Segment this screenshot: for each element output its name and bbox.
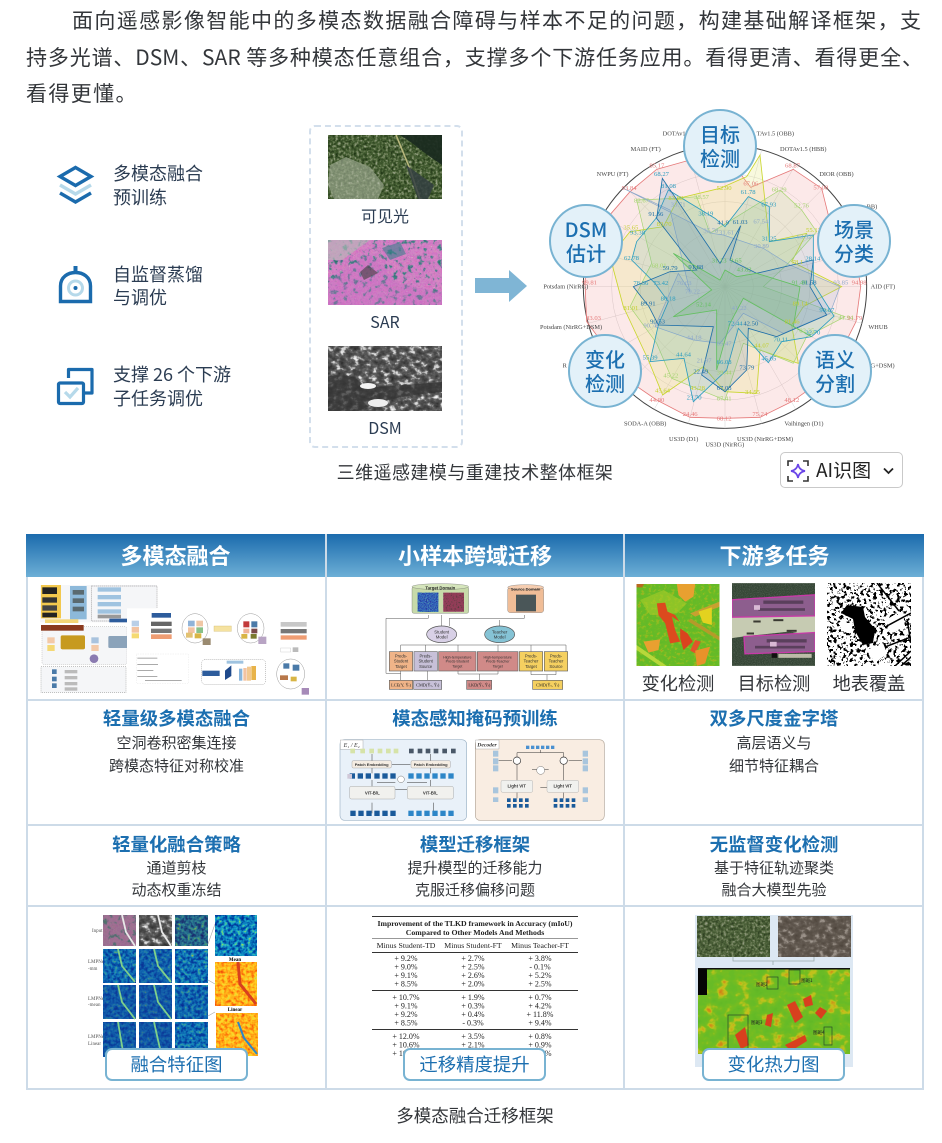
radar chart: 59.79 <box>663 265 678 272</box>
table: accuracy improvement: + 9.2% <box>394 1010 418 1019</box>
feature: 26 downstream tasks <box>113 361 231 410</box>
figure: change heatmap: 图斑1 <box>801 977 813 984</box>
radar chart: 67.41 <box>717 396 732 403</box>
radar chart: 91.79 <box>847 315 863 322</box>
header: few-sample cross-domain transfer: 小样本跨域迁移 <box>398 539 552 571</box>
diagram: student-teacher transfer: Source Domain <box>511 586 541 591</box>
radar chart: 41.22 <box>732 305 747 312</box>
table: accuracy improvement: + 10.6% <box>392 1040 420 1050</box>
radar chart: 21.97 <box>697 358 712 365</box>
feature: multimodal pretraining: 多模态融合 <box>113 160 203 186</box>
intro paragraph: 看得更懂。 <box>26 78 138 108</box>
radar chart: 44.90 <box>649 397 665 404</box>
label: land cover: 地表覆盖 <box>833 670 905 696</box>
heading: 轻量级多模态融合 <box>103 705 250 731</box>
radar chart: 78.36 <box>633 280 649 287</box>
radar chart: Vaihingen (D1) <box>784 420 824 427</box>
table: accuracy improvement: + 10.7% <box>392 993 420 1002</box>
radar chart: 73.42 <box>653 280 668 287</box>
radar chart: G+DSM) <box>871 362 895 369</box>
figure: fused feature maps: LMPNet <box>88 960 106 965</box>
bubble: scene classification: 分类 <box>834 238 874 267</box>
label: SAR: SAR <box>370 309 400 333</box>
text: 融合大模型先验 <box>721 879 826 900</box>
radar chart: 80.18 <box>661 296 676 303</box>
table: accuracy improvement: + 0.7% <box>528 993 552 1002</box>
radar chart: 61.78 <box>741 189 756 196</box>
radar chart: 67.03 <box>717 385 732 392</box>
image: object detection sample <box>732 583 815 666</box>
radar chart: 22.49 <box>693 368 709 375</box>
diagram: student-teacher transfer: High-temperature <box>483 656 512 660</box>
figure: fused feature maps: LMPNet <box>88 997 106 1002</box>
radar chart: 83.88 <box>668 195 684 202</box>
radar chart: 32.70 <box>805 330 821 337</box>
radar chart: 81.01 <box>623 305 638 312</box>
table: accuracy improvement: + 4.2% <box>528 1002 552 1010</box>
header: few-sample cross-domain transfer <box>327 534 623 577</box>
image: land cover sample <box>827 583 911 666</box>
radar chart: 35.78 <box>703 228 719 235</box>
radar chart: 94.98 <box>852 280 867 287</box>
figure: fused feature maps: LMPNet <box>88 1035 106 1040</box>
header: downstream multitask: 下游多任务 <box>719 539 830 571</box>
radar chart: 44.18 <box>687 334 702 341</box>
figure: fused feature maps: Mean <box>229 958 241 963</box>
figure: change heatmap: 图斑3 <box>751 1019 763 1026</box>
radar chart: 89.91 <box>641 300 656 307</box>
radar chart: 52.76 <box>794 202 810 209</box>
radar chart: 41.94 <box>838 314 854 321</box>
radar chart: BB) <box>867 204 877 211</box>
table: accuracy improvement: + 3.5% <box>461 1032 485 1041</box>
diagram: encoder and decoder: Patch Embedding <box>355 762 389 767</box>
diagram: encoder and decoder: Patch Embedding <box>414 762 448 767</box>
diagram: encoder and decoder: Light ViT <box>553 784 572 789</box>
figure: fused feature maps: -mm <box>88 967 98 972</box>
tag: change heatmap <box>702 1048 845 1081</box>
diagram: student-teacher transfer: Model <box>436 635 448 640</box>
radar chart: 45.64 <box>655 387 671 394</box>
caption: overall framework: 三维遥感建模与重建技术整体框架 <box>337 459 613 485</box>
table: accuracy improvement: + 2.0% <box>461 980 485 988</box>
diagram: student-teacher transfer: Target <box>493 664 503 668</box>
radar chart: 63.52 <box>797 234 812 241</box>
text: 动态权重冻结 <box>131 879 222 900</box>
text <box>109 732 244 776</box>
table: accuracy improvement: + 11.8% <box>527 1010 554 1019</box>
image: change detection sample <box>636 584 720 666</box>
table: accuracy improvement: + 10.4% <box>392 1049 420 1058</box>
icon: AI scan <box>787 460 809 482</box>
figure: change heatmap <box>695 915 853 1067</box>
radar chart: 66.08 <box>717 359 732 366</box>
cell: dual multiscale pyramid <box>710 705 838 776</box>
table: accuracy improvement: + 2.6% <box>461 971 485 980</box>
bubble: change detection: 检测 <box>585 368 625 397</box>
image: SAR <box>328 240 442 305</box>
table: accuracy improvement: + 9.1% <box>394 971 418 980</box>
radar chart: 70.22 <box>685 288 700 295</box>
radar chart: 31.13 <box>712 258 727 265</box>
table: accuracy improvement: - 0.3% <box>462 1018 484 1028</box>
radar chart: 42.50 <box>743 321 759 328</box>
bubble: DSM estimation <box>549 204 623 278</box>
table: accuracy improvement: + 8.5% <box>394 980 418 988</box>
tag: transfer accuracy improvement: 迁移精度提升 <box>419 1051 530 1077</box>
icon: self-supervised target <box>58 266 92 304</box>
figure: fused feature maps <box>88 915 258 1057</box>
cell: lightweight fusion strategy <box>112 831 241 900</box>
text: 提升模型的迁移能力 <box>407 857 542 878</box>
table: accuracy improvement: + 8.5% <box>394 1018 418 1028</box>
feature: multimodal pretraining <box>113 160 203 210</box>
radar chart: MAID (FT) <box>631 146 661 153</box>
radar chart: 68.29 <box>772 186 787 193</box>
radar chart: 90.53 <box>650 318 666 325</box>
radar chart: 31.61 <box>719 230 734 237</box>
table: accuracy improvement: + 3.8% <box>528 954 552 963</box>
tag: transfer accuracy improvement <box>403 1048 546 1081</box>
diagram: student-teacher transfer: Student <box>419 659 434 664</box>
radar chart: 91.58 <box>802 280 817 287</box>
bubble: semantic segmentation: 分割 <box>815 368 855 397</box>
radar chart: Potsdam (NirRG) <box>543 283 588 290</box>
cell: modality-aware mask pretraining <box>340 705 605 821</box>
text: 细节特征耦合 <box>729 754 819 776</box>
table: accuracy improvement: Compared to Other Models And Methods <box>406 928 544 937</box>
radar chart: 62.78 <box>624 255 640 262</box>
text: 高层语义与 <box>736 732 812 753</box>
diagram: student-teacher transfer: Student <box>394 659 409 664</box>
heading: 双多尺度金字塔 <box>710 705 838 731</box>
radar chart: 82.67 <box>634 197 650 204</box>
radar chart: 99.81 <box>582 279 597 286</box>
text: 空洞卷积密集连接 <box>116 732 236 753</box>
bubble: semantic segmentation <box>798 334 872 408</box>
diagram: student-teacher transfer: Preds- <box>525 654 538 659</box>
diagram: multimodal fusion network <box>40 585 309 695</box>
table: accuracy improvement: + 5.2% <box>528 971 552 980</box>
intro paragraph: 面向遥感影像智能中的多模态数据融合障碍与样本不足的问题，构建基础解译框架，支 <box>72 5 922 35</box>
radar chart: 28.14 <box>805 256 821 263</box>
radar chart: 44.64 <box>676 352 692 359</box>
radar chart: 72.44 <box>728 321 743 328</box>
radar chart: 33.71 <box>671 202 686 209</box>
arrow <box>475 270 527 302</box>
diagram: student-teacher transfer: Source <box>549 664 563 669</box>
radar chart: 38.57 <box>694 194 710 201</box>
bubble: change detection <box>568 334 642 408</box>
diagram: encoder and decoder: Light ViT <box>507 784 526 789</box>
radar chart: 65.47 <box>717 340 732 347</box>
heading: 模型迁移框架 <box>420 831 530 857</box>
heading: 无监督变化检测 <box>710 831 838 857</box>
radar chart: 85.17 <box>649 162 665 169</box>
diagram: student-teacher transfer: Model <box>494 635 506 640</box>
table: accuracy improvement: + 2.5% <box>461 962 485 972</box>
text <box>407 857 542 900</box>
radar chart: 43.82 <box>737 267 752 274</box>
radar chart: 68.27 <box>654 171 670 178</box>
radar chart: 24.46 <box>683 411 698 418</box>
diagram: student-teacher transfer: Teacher <box>524 659 539 664</box>
bubble: object detection <box>683 109 757 183</box>
button: AI image recognition <box>780 452 903 488</box>
text: 跨模态特征对称校准 <box>109 754 244 776</box>
radar chart: 90.78 <box>643 322 659 329</box>
radar chart: US3D (NirRG) <box>705 441 744 448</box>
label: DSM: DSM <box>368 415 402 439</box>
radar chart: Potsdam (NirRG+DSM) <box>540 324 602 331</box>
diagram: student-teacher transfer: Target <box>525 664 538 669</box>
radar chart: 81.08 <box>661 183 677 190</box>
radar chart: 39.44 <box>717 370 732 377</box>
radar chart: 41.9 <box>717 220 730 227</box>
table: accuracy improvement: + 9.0% <box>394 962 418 972</box>
radar chart: 91.49 <box>792 279 807 286</box>
tag: fusion feature map <box>105 1048 248 1081</box>
table: accuracy improvement: Improvement of the TLKD framework in Accuracy (mIoU) <box>378 919 573 928</box>
radar chart: 34.55 <box>745 389 761 396</box>
bubble: scene classification: 场景 <box>834 214 874 243</box>
radar chart: 67.06 <box>743 181 759 188</box>
diagram: student-teacher transfer: CMD(Ŷs, Ŷt) <box>536 683 560 689</box>
table: accuracy improvement: + 0.4% <box>461 1010 485 1019</box>
radar chart: 30.89 <box>754 243 770 250</box>
bubble: DSM estimation: DSM <box>565 214 607 243</box>
radar chart: 9.65 <box>730 258 742 265</box>
radar chart: 93.84 <box>622 185 637 192</box>
table: accuracy improvement: Minus Teacher-FT <box>511 941 569 950</box>
table: accuracy improvement: + 2.7% <box>461 954 485 963</box>
radar chart: 48.12 <box>784 397 799 404</box>
radar chart: 43.28 <box>690 385 706 392</box>
radar chart: 82.25 <box>799 328 815 335</box>
radar chart: 52.14 <box>696 302 712 309</box>
figure: fused feature maps: -mean <box>88 1003 101 1008</box>
label: object detection: 目标检测 <box>738 670 810 696</box>
radar chart: 68.87 <box>785 162 801 169</box>
diagram: student-teacher transfer: Source <box>419 664 433 669</box>
diagram: student-teacher transfer: CMD(Ŷs, Ŷt) <box>416 683 440 689</box>
radar chart: 67.93 <box>761 202 777 209</box>
feature: multimodal pretraining: 预训练 <box>113 184 167 210</box>
table: accuracy improvement: + 1.9% <box>461 993 485 1002</box>
radar chart: US3D (D1) <box>669 436 698 443</box>
intro paragraph: 持多光谱、DSM、SAR 等多种模态任意组合，支撑多个下游任务应用。看得更清、看得更全、 <box>26 42 923 72</box>
radar chart: 76.63 <box>677 280 692 287</box>
radar chart: 55.13 <box>806 227 822 234</box>
radar chart: 93.85 <box>833 280 849 287</box>
feature: 26 downstream tasks: 支撑 26 个下游 <box>113 361 231 387</box>
radar chart: 78.1 <box>792 259 803 266</box>
diagram: student-teacher transfer: LCE(Y, Ŷt) <box>391 683 411 689</box>
caption: multimodal fusion transfer framework: 多模态融合迁移框架 <box>396 1103 554 1128</box>
table: accuracy improvement: + 0.8% <box>528 1032 552 1041</box>
header: multimodal fusion: 多模态融合 <box>120 539 230 571</box>
radar chart: DIOR (OBB) <box>819 171 854 178</box>
radar chart: 31.25 <box>762 236 777 243</box>
figure: fused feature maps: Linear <box>228 1008 243 1013</box>
radar chart: AID (FT) <box>871 283 895 290</box>
cell: lightweight multimodal fusion <box>103 705 250 776</box>
radar chart: 89.14 <box>793 300 808 307</box>
bubble: object detection: 检测 <box>700 143 740 172</box>
text: 克服迁移偏移问题 <box>415 879 535 900</box>
cell: unsupervised change detection <box>710 831 838 900</box>
text <box>131 857 222 900</box>
figure: fused feature maps: Linear <box>88 1042 101 1047</box>
radar chart: NWPU (FT) <box>597 171 628 178</box>
diagram: student-teacher transfer: Preds-Teacher <box>486 660 510 664</box>
radar chart: 83.03 <box>586 315 602 322</box>
figure: fused feature maps: Input <box>92 929 103 934</box>
diagram: encoder and decoder: ViT-B/L <box>365 790 380 795</box>
radar chart: 70.11 <box>773 336 788 343</box>
radar chart: SODA-A (OBB) <box>624 420 666 427</box>
header: multimodal fusion <box>26 534 325 577</box>
table: accuracy improvement: + 2.1% <box>461 1040 485 1050</box>
radar chart: 89.70 <box>657 221 672 228</box>
header: downstream multitask <box>625 534 924 577</box>
radar chart: 81.46 <box>785 318 800 325</box>
radar chart: 68.01 <box>652 262 667 269</box>
radar chart <box>540 130 895 448</box>
table: accuracy improvement: + 8.4% <box>528 1049 552 1058</box>
radar chart: US3D (NirRG+DSM) <box>737 436 793 443</box>
label: change detection: 变化检测 <box>642 670 714 696</box>
radar chart: 93.38 <box>630 230 646 237</box>
bubble: object detection: 目标 <box>700 119 740 148</box>
diagram: student-teacher transfer: Teacher <box>492 629 508 634</box>
table: accuracy improvement: + 0.3% <box>461 1002 485 1010</box>
heading: 轻量化融合策略 <box>112 831 241 857</box>
radar chart: 23.70 <box>687 394 702 401</box>
diagram: encoder and decoder: ViT-B/L <box>423 790 438 795</box>
text <box>729 732 819 776</box>
diagram: student-teacher transfer: Preds- <box>550 654 563 659</box>
diagram: student-teacher transfer: LKD(Ŷt, Ŷt) <box>468 683 491 689</box>
radar chart: 75.24 <box>752 411 768 418</box>
bubble: DSM estimation: 估计 <box>566 238 606 267</box>
icon: check copies <box>56 368 94 406</box>
tag: fusion feature map: 融合特征图 <box>131 1051 222 1077</box>
table: accuracy improvement: + 0.9% <box>528 1040 552 1050</box>
radar chart: 68.12 <box>717 416 732 423</box>
diagram: student-teacher transfer: High-temperature <box>443 656 472 660</box>
bubble: scene classification <box>817 204 891 278</box>
feature: self-supervised distillation: 与调优 <box>113 284 167 310</box>
diagram: student-teacher transfer: Teacher <box>549 659 564 664</box>
diagram: encoder and decoder: E₁ / E₂ <box>343 743 360 749</box>
icon: chevron <box>883 468 894 474</box>
diagram: student-teacher transfer: Target <box>395 664 408 669</box>
radar chart: 67.54 <box>753 218 769 225</box>
image: DSM <box>328 346 442 411</box>
text <box>714 857 834 900</box>
radar chart: R <box>563 362 568 369</box>
bubble: semantic segmentation: 语义 <box>815 344 855 373</box>
text: 通道剪枝 <box>146 857 206 878</box>
diagram: student-teacher transfer: Preds- <box>395 654 408 659</box>
table: accuracy improvement: Minus Student-FT <box>444 941 502 950</box>
radar chart: 45.05 <box>761 356 777 363</box>
feature: self-supervised distillation <box>113 260 203 310</box>
radar chart: 55.39 <box>643 355 658 362</box>
feature: 26 downstream tasks: 子任务调优 <box>113 384 203 410</box>
label: visible light: 可见光 <box>361 203 409 227</box>
label: AI recognition: AI识图 <box>816 456 871 483</box>
feature: self-supervised distillation: 自监督蒸馏 <box>113 260 203 286</box>
radar chart: 57.08 <box>813 184 829 191</box>
table: accuracy improvement: + 9.1% <box>394 1002 418 1010</box>
table: accuracy improvement: + 12.0% <box>392 1032 420 1041</box>
radar chart: WHUB <box>868 324 888 331</box>
icon: layers <box>56 166 94 204</box>
table: accuracy improvement: + 2.5% <box>528 980 552 988</box>
bubble: change detection: 变化 <box>585 344 625 373</box>
radar chart: 45.22 <box>663 372 678 379</box>
radar chart: 73.79 <box>739 364 755 371</box>
radar chart: DOTAv1 <box>663 130 686 137</box>
diagram: encoder and decoder: Decoder <box>476 743 498 749</box>
intro paragraph <box>26 5 923 108</box>
radar chart: 52.90 <box>717 185 732 192</box>
text: 基于特征轨迹聚类 <box>714 857 834 878</box>
radar chart: 61.03 <box>733 219 748 226</box>
table frame <box>26 534 924 1090</box>
radar chart: TAv1.5 (OBB) <box>757 130 794 137</box>
table: accuracy improvement: Minus Student-TD <box>377 941 436 950</box>
radar chart: 44.07 <box>754 342 770 349</box>
cell: model transfer framework <box>407 831 542 900</box>
radar chart: 90.07 <box>819 307 835 314</box>
diagram: student-teacher transfer: Preds-Student <box>446 660 469 664</box>
radar chart: 35.65 <box>623 224 639 231</box>
radar chart: 91.66 <box>648 211 664 218</box>
figure: change heatmap: 图斑2 <box>756 981 768 988</box>
image: visible light <box>328 135 442 199</box>
diagram: encoder and decoder <box>340 739 605 821</box>
panel: input modalities <box>309 125 463 448</box>
figure: change heatmap: 图斑4 <box>813 1029 825 1036</box>
diagram: student-teacher transfer <box>386 583 568 690</box>
diagram: student-teacher transfer: Target <box>452 664 462 668</box>
heading: 模态感知掩码预训练 <box>392 705 558 731</box>
radar chart: 91.88 <box>688 264 704 271</box>
radar chart: DOTAv1.5 (HBB) <box>780 146 826 153</box>
table: accuracy improvement: - 0.1% <box>529 962 551 972</box>
diagram: student-teacher transfer: Preds- <box>420 654 432 659</box>
radar chart: 38.19 <box>698 210 714 217</box>
tag: change heatmap: 变化热力图 <box>728 1051 819 1077</box>
diagram: student-teacher transfer: Student <box>434 629 450 634</box>
table: accuracy improvement: + 9.4% <box>528 1018 552 1028</box>
diagram: student-teacher transfer: Target Domain <box>425 585 456 590</box>
table: accuracy improvement: + 9.2% <box>394 954 418 963</box>
table: accuracy improvement <box>372 916 578 1058</box>
